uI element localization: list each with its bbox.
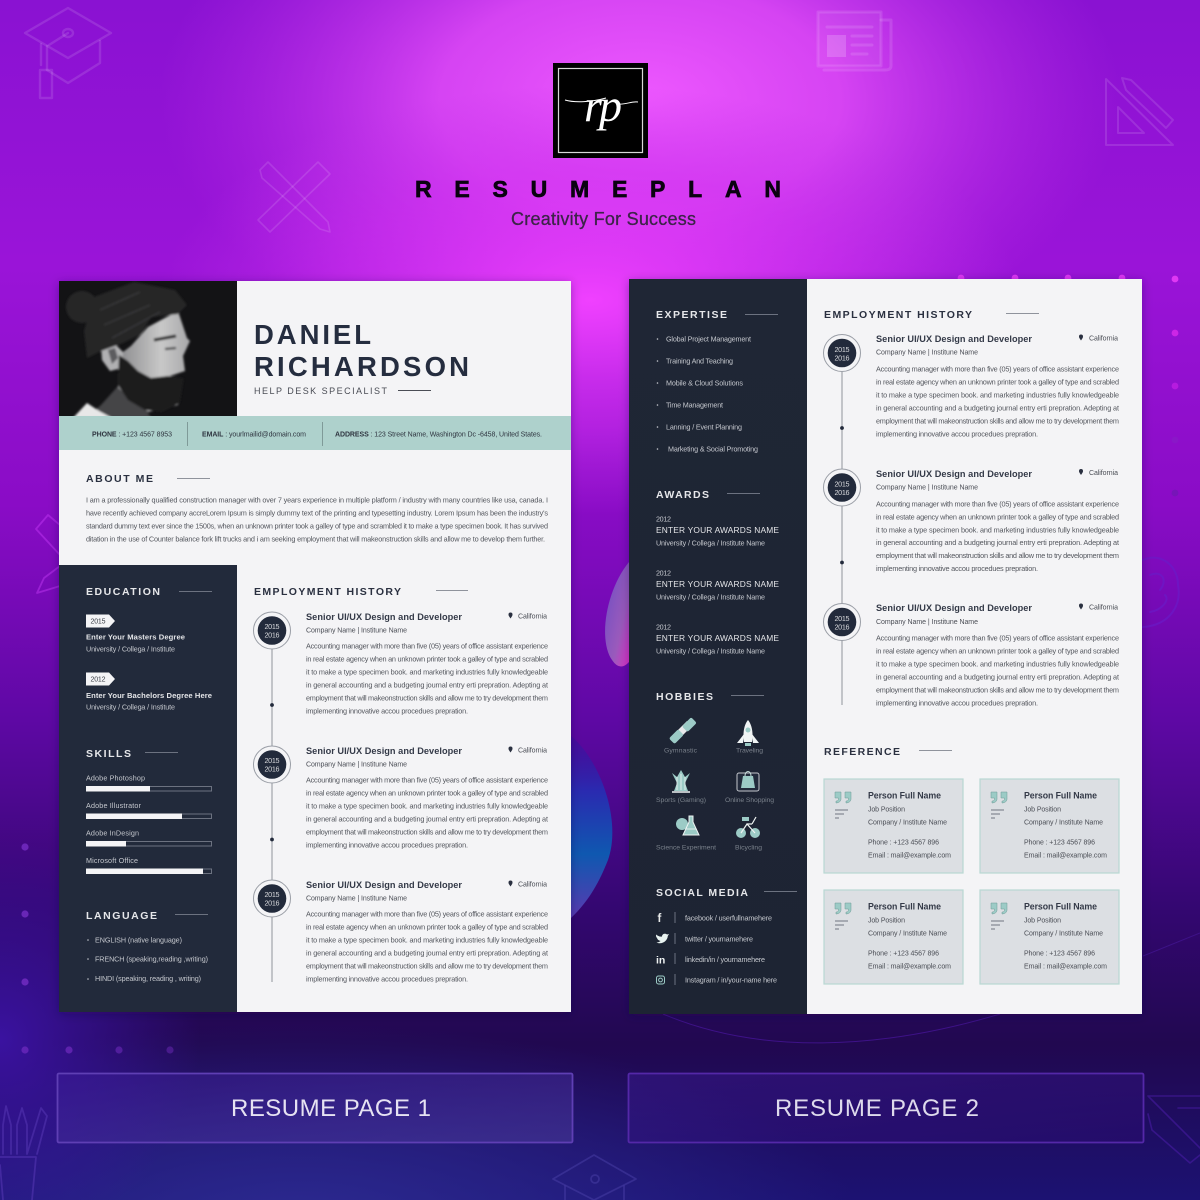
job entry 3: California [518, 882, 547, 888]
icon: science flask [676, 816, 699, 835]
reference card 2 [980, 779, 1119, 873]
reference card 3: Company / Institute Name [868, 930, 947, 938]
job entry 2: California [518, 748, 547, 754]
education section [86, 586, 212, 712]
job entry 2 [876, 469, 1119, 573]
icon: newspaper [818, 12, 891, 70]
job entry 2: it to make a type specimen book. and marketing industries fully knowledgeable [306, 802, 548, 810]
reference card 1: Person Full Name [868, 790, 941, 800]
tagline: Creativity For Success [511, 209, 696, 229]
language section: HINDI (speaking, reading , writing) [95, 974, 201, 983]
contact band: PHONE : +123 4567 8953 [92, 432, 172, 438]
skills section: Adobe Photoshop [86, 774, 145, 782]
dark sidebar page 2 [629, 279, 807, 1014]
job entry 2: Senior UI/UX Design and Developer [306, 746, 462, 756]
about me section: I am a professionally qualified construction manager with over 7 years experience in multiple platform / industry with many countries like usa, canada. I [86, 496, 548, 504]
reference card 2: Company / Institute Name [1024, 820, 1103, 826]
job entry 1: in real estate agency when an unknown printer took a galley of type and scrabled [876, 378, 1119, 386]
reference card 1: Phone : +123 4567 896 [868, 840, 939, 846]
job entry 1: Senior UI/UX Design and Developer [306, 612, 462, 622]
job entry 3: Senior UI/UX Design and Developer [306, 880, 462, 890]
job entry 1: it to make a type specimen book. and marketing industries fully knowledgeable [876, 390, 1119, 400]
skills section: Adobe Illustrator [86, 801, 142, 810]
education section: University / Collega / Institute [86, 644, 175, 654]
education section: 2015 [90, 618, 106, 626]
icon: brain right [1143, 558, 1179, 627]
job entry 1: Company Name | Institune Name [876, 350, 978, 356]
awards section: ENTER YOUR AWARDS NAME [656, 579, 779, 589]
job entry 2: Accounting manager with more than five (05) years of office assistant experience [876, 500, 1119, 508]
candidate name: DANIEL [254, 319, 371, 350]
job entry 2: it to make a type specimen book. and marketing industries fully knowledgeable [876, 526, 1119, 534]
reference card 2: Phone : +123 4567 896 [1024, 840, 1095, 846]
education section: University / Collega / Institute [86, 702, 175, 712]
reference card 3: Job Position [868, 918, 905, 924]
job entry 2: in general accounting and a budgeting journal entry erti prepration. Adepting at [876, 538, 1119, 547]
job entry 1 [306, 612, 548, 716]
icon: linkedin: in [656, 954, 665, 966]
icon: rocket [737, 720, 759, 746]
awards section: University / Collega / Institute Name [656, 646, 765, 656]
job entry 1: Accounting manager with more than five (05) years of office assistant experience [306, 642, 548, 650]
dark sidebar page 1 [59, 565, 237, 1012]
expertise section: Marketing & Social Promoting [668, 444, 758, 454]
decorative dots [958, 275, 1178, 496]
expertise section: EXPERTISE [656, 309, 727, 321]
blob shapes between pages [571, 562, 1200, 1043]
job entry 3: in real estate agency when an unknown printer took a galley of type and scrabled [876, 646, 1119, 656]
about me section: have recently achieved company accreLorem Ipsum is simply dummy text of the printing and typesetting industry. Lorem Ipsum has been the industry's [86, 508, 548, 518]
portrait photo [59, 281, 237, 418]
timeline page 1: 2015 [264, 890, 280, 899]
reference card 4: Email : mail@example.com [1024, 964, 1107, 970]
reference card 4: Company / Institute Name [1024, 930, 1103, 938]
job entry 3: in real estate agency when an unknown printer took a galley of type and scrabled [306, 922, 548, 932]
awards section: 2012 [656, 622, 671, 632]
awards section [656, 489, 779, 656]
job entry 3: Company Name | Institune Name [876, 619, 978, 626]
logo [553, 63, 648, 158]
job entry 1: employment that will makeonstruction skills and allow me to try development them [876, 416, 1119, 426]
contact band [59, 416, 571, 450]
job entry 2: in real estate agency when an unknown printer took a galley of type and scrabled [306, 788, 548, 798]
job entry 2: in real estate agency when an unknown printer took a galley of type and scrabled [876, 512, 1119, 522]
job entry 3: Company Name | Institune Name [306, 896, 407, 902]
contact band: ADDRESS : 123 Street Name, Washington Dc -6458, United States. [335, 432, 542, 438]
job entry 3: in general accounting and a budgeting journal entry erti prepration. Adepting at [306, 948, 548, 958]
timeline page 1: 2016 [264, 764, 280, 774]
awards section: University / Collega / Institute Name [656, 592, 765, 602]
job entry 1: Senior UI/UX Design and Developer [876, 334, 1032, 344]
icon: graduation cap top left [25, 8, 111, 98]
employment history page 1 [254, 586, 548, 984]
job entry 2: implementing innovative accou procedues prepration. [306, 840, 468, 850]
education section: Enter Your Bachelors Degree Here [86, 691, 212, 700]
timeline page 2: 2015 [834, 480, 850, 488]
skills section: Adobe InDesign [86, 828, 139, 838]
page 2 paper [629, 279, 1142, 1014]
job title: HELP DESK SPECIALIST [254, 386, 388, 396]
language section: ENGLISH (native language) [95, 936, 182, 944]
reference card 4 [980, 890, 1119, 984]
social media section: linkedin/in / yournamehere [685, 955, 765, 964]
icon: facebook: f [658, 913, 662, 925]
job entry 1: in general accounting and a budgeting journal entry erti prepration. Adepting at [306, 680, 548, 690]
timeline page 2: 2015 [834, 345, 850, 354]
panel: resume page 1 [59, 281, 571, 1012]
about me section [86, 473, 548, 544]
expertise section: Mobile & Cloud Solutions [666, 378, 743, 388]
social media section: twitter / yournamehere [685, 934, 753, 944]
job entry 1: it to make a type specimen book. and marketing industries fully knowledgeable [306, 668, 548, 676]
job entry 2: Senior UI/UX Design and Developer [876, 469, 1032, 479]
about me section: standard dummy text ever since the 1500s, when an unknown printer took a galley of type and scrambled it to make a type specimen book. It has survived [86, 522, 548, 530]
reference card 3: Email : mail@example.com [868, 964, 951, 970]
job entry 2: Company Name | Institune Name [306, 762, 407, 768]
timeline page 2: 2016 [834, 354, 850, 362]
reference card 1: Company / Institute Name [868, 820, 947, 826]
job entry 3: Accounting manager with more than five (05) years of office assistant experience [306, 910, 548, 918]
employment history page 1: EMPLOYMENT HISTORY [254, 586, 401, 598]
hobbies section: Traveling [736, 748, 763, 754]
language section: FRENCH (speaking,reading ,writing) [95, 954, 208, 964]
button: resume page 2 [628, 1074, 1144, 1142]
job entry 1: California [1089, 336, 1118, 342]
job entry 3: implementing innovative accou procedues prepration. [306, 974, 468, 984]
job entry 1: implementing innovative accou procedues prepration. [876, 430, 1038, 438]
social media section: facebook / userfullnamehere [685, 914, 772, 922]
reference section: REFERENCE [824, 746, 900, 758]
hobbies section: Gymnastic [664, 748, 698, 754]
button: resume page 1 [58, 1074, 572, 1142]
expertise section: Lanning / Event Planning [666, 422, 742, 432]
awards section: ENTER YOUR AWARDS NAME [656, 525, 779, 535]
reference card 1 [824, 779, 963, 873]
icon: pencil cup bottom left [0, 1106, 47, 1200]
awards section: University / Collega / Institute Name [656, 538, 765, 548]
awards section: AWARDS [656, 489, 709, 501]
hobbies section: Sports (Gaming) [656, 797, 706, 804]
job entry 2 [306, 746, 548, 850]
job entry 2: California [1089, 470, 1118, 477]
skills section: Microsoft Office [86, 856, 138, 865]
social media section: SOCIAL MEDIA [656, 887, 748, 899]
timeline page 2: 2015 [834, 614, 850, 623]
job entry 1 [876, 334, 1119, 438]
icon: online shopping [737, 772, 759, 791]
about me section: ABOUT ME [86, 473, 153, 485]
job entry 3: California [1089, 604, 1118, 612]
social media section [656, 887, 797, 985]
expertise section: Global Project Management [666, 334, 751, 344]
expertise section: Training And Teaching [666, 356, 733, 366]
timeline page 1: 2016 [264, 898, 280, 908]
reference card 4: Phone : +123 4567 896 [1024, 950, 1095, 958]
timeline page 1: 2015 [264, 622, 280, 631]
panel: resume page 2 [629, 279, 1142, 1014]
hobbies section: Bicycling [735, 844, 762, 852]
awards section: ENTER YOUR AWARDS NAME [656, 633, 779, 643]
reference card 1: Job Position [868, 806, 905, 814]
awards section: 2012 [656, 568, 671, 578]
about me section: ditation in the use of Counter balance fork lift trucks and i am seeking employment that will makeonstruction skills and allow me to develop them further. [86, 534, 545, 544]
hobbies section: HOBBIES [656, 691, 713, 703]
button: resume page 1: RESUME PAGE 1 [231, 1095, 431, 1122]
hobbies section: Science Experiment [656, 844, 716, 852]
timeline page 2: 2016 [834, 488, 850, 497]
job entry 3: it to make a type specimen book. and marketing industries fully knowledgeable [306, 936, 548, 944]
job entry 1: employment that will makeonstruction skills and allow me to try development them [306, 694, 548, 702]
job entry 1: in general accounting and a budgeting journal entry erti prepration. Adepting at [876, 404, 1119, 412]
reference card 2: Person Full Name [1024, 790, 1097, 800]
job entry 2: Accounting manager with more than five (05) years of office assistant experience [306, 776, 548, 784]
timeline page 2 [824, 334, 860, 705]
reference card 2: Email : mail@example.com [1024, 852, 1107, 860]
icon: sports trophies [672, 770, 690, 792]
job entry 2: Company Name | Institune Name [876, 484, 978, 492]
timeline page 2: 2016 [834, 622, 850, 632]
logo: rp [584, 80, 622, 131]
job entry 1: in real estate agency when an unknown printer took a galley of type and scrabled [306, 654, 548, 664]
job entry 2: in general accounting and a budgeting journal entry erti prepration. Adepting at [306, 814, 548, 824]
expertise section: Time Management [666, 400, 723, 410]
reference card 1: Email : mail@example.com [868, 852, 951, 860]
job entry 3: Senior UI/UX Design and Developer [876, 603, 1032, 613]
job entry 1: California [518, 614, 547, 620]
job entry 2: employment that will makeonstruction skills and allow me to try development them [876, 551, 1119, 560]
job entry 3: employment that will makeonstruction skills and allow me to try development them [306, 962, 548, 970]
education section: EDUCATION [86, 586, 160, 598]
reference card 4: Job Position [1024, 918, 1061, 924]
job entry 1: implementing innovative accou procedues prepration. [306, 706, 468, 716]
icon: instagram [656, 976, 664, 984]
timeline page 1: 2016 [264, 630, 280, 640]
timeline page 1: 2015 [264, 756, 280, 765]
contact band: EMAIL : yourlmailid@domain.com [202, 432, 306, 438]
timeline page 1 [254, 612, 290, 982]
social media section: Instagram / in/your-name here [685, 976, 777, 984]
employment history page 2: EMPLOYMENT HISTORY [824, 309, 972, 321]
job entry 3: in general accounting and a budgeting journal entry erti prepration. Adepting at [876, 672, 1119, 682]
awards section: 2012 [656, 514, 671, 524]
reference section [824, 746, 1119, 984]
icon: ruler and pencil left [36, 515, 60, 593]
skills section: SKILLS [86, 748, 131, 760]
hobbies section [656, 691, 774, 852]
hobbies section: Online Shopping [725, 797, 774, 804]
education section: Enter Your Masters Degree [86, 632, 185, 642]
job entry 3: implementing innovative accou procedues prepration. [876, 698, 1038, 708]
icon: gymnastic dumbbell [669, 717, 697, 744]
language section: LANGUAGE [86, 910, 157, 922]
employment history page 2 [824, 309, 1119, 708]
icon: twitter [656, 934, 669, 943]
job entry 2: employment that will makeonstruction skills and allow me to try development them [306, 828, 548, 836]
job entry 1: Company Name | Institune Name [306, 628, 407, 634]
candidate name [254, 319, 469, 382]
brand name: RESUMEPLAN [415, 176, 781, 202]
button: resume page 2: RESUME PAGE 2 [775, 1095, 979, 1122]
expertise section [656, 309, 778, 454]
icon: graduation cap bottom center [553, 1155, 636, 1200]
education section: 2012 [90, 676, 106, 684]
icon: crossed pencil and ruler [258, 162, 330, 232]
job entry 3: it to make a type specimen book. and marketing industries fully knowledgeable [876, 660, 1119, 668]
job entry 3 [306, 880, 548, 984]
icon: ruler triangle and pencil [1106, 78, 1173, 145]
reference card 3: Person Full Name [868, 902, 941, 912]
language section [86, 910, 208, 983]
skills section [86, 748, 212, 874]
job entry 1: Accounting manager with more than five (05) years of office assistant experience [876, 364, 1119, 374]
job entry 3 [876, 603, 1119, 708]
job entry 2: implementing innovative accou procedues prepration. [876, 564, 1038, 573]
reference card 2: Job Position [1024, 806, 1061, 814]
reference card 3: Phone : +123 4567 896 [868, 950, 939, 958]
icon: ruler pencil bottom right [1148, 1096, 1200, 1163]
icon: bicycle [736, 817, 760, 838]
job entry 3: employment that will makeonstruction skills and allow me to try development them [876, 686, 1119, 694]
job entry 3: Accounting manager with more than five (05) years of office assistant experience [876, 634, 1119, 642]
reference card 3 [824, 890, 963, 984]
page 1 paper [59, 281, 571, 1012]
reference card 4: Person Full Name [1024, 902, 1097, 912]
candidate name: RICHARDSON [254, 351, 469, 382]
